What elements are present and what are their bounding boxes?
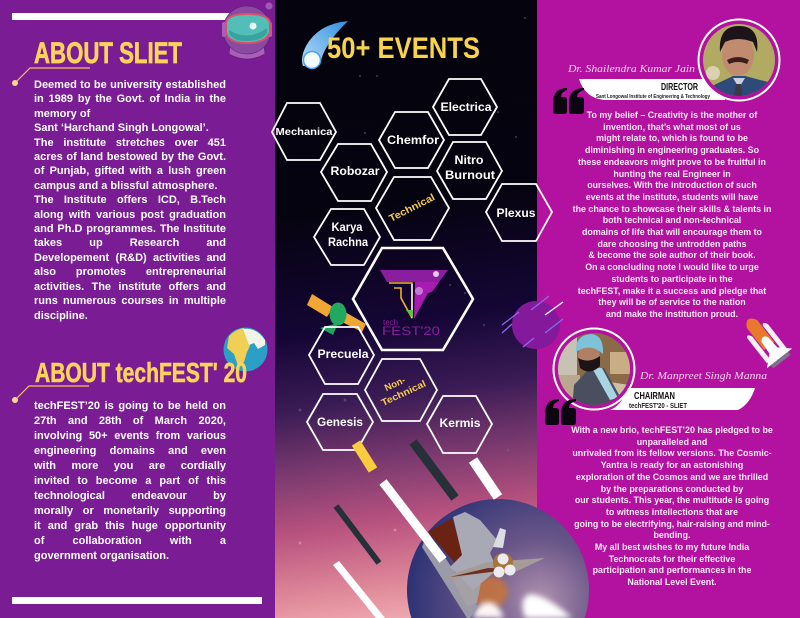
text block: director message: dare choosing the untrodden paths [598,239,746,249]
chairman name: Dr. Manpreet Singh Manna [639,370,768,382]
hexagon: Plexus: Plexus [496,208,536,220]
text block: director message: events at the institute, students will have [586,192,758,202]
text block: chairman message: to witness intellections that are [606,507,738,517]
hexagon: Nitro Burnout: Nitro [454,155,484,167]
text block: director message: the chance to showcase their skills & talents in [573,204,771,214]
hexagon: Chemfor [379,112,444,168]
hexagon: Nitro Burnout [437,142,502,199]
text block: about sliet: in 1989 by the Govt. of India in the [34,93,226,105]
text block: director message: both technical and non-technical [603,215,741,225]
speed streaks [333,442,498,618]
text block: chairman message: With a new brio, techFEST’20 has pledged to be [571,425,773,435]
text block: about sliet: runs numerous courses in multiple [34,295,226,307]
text block: about sliet [34,79,226,322]
text block: director message: and make the institution proud. [606,309,738,319]
panel: messages (right column) [537,0,800,618]
icon: comet [302,21,348,68]
text block: chairman message: Yantra is ready for an astonishing [601,460,743,470]
text block: chairman message: National Level Event. [627,577,717,587]
text block: about sliet: Deemed to be university established [34,79,226,91]
text block: about sliet: The institute stretches over 451 [34,137,226,149]
text block: about techfest: techFEST’20 is going to be held on [34,400,226,412]
hexagon: Technical [376,177,449,240]
chairman ribbon: CHAIRMAN [634,390,675,402]
text block: about techfest: invited to become a part of this [34,475,226,487]
director name: Dr. Shailendra Kumar Jain [567,63,696,75]
text block: about techfest: engineering domains and even [34,445,226,457]
text block: director message: On a concluding note I would like to urge [585,262,759,272]
text block: director message: To my belief – Creativity is the mother of [587,110,757,120]
text block: director message [572,110,771,319]
panel: about (left column) [0,0,275,618]
hexagon: Mechanica: Mechanica [276,126,333,138]
hexagon: Genesis: Genesis [317,417,363,429]
text block: director message: domains of life that will encourage them to [582,227,762,237]
hexagon: Non-Technical: Technical [380,379,428,409]
hexagon: Electrica: Electrica [440,102,492,114]
hexagon: Non-Technical: Non- [383,375,407,394]
hexagon: Precuela: Precuela [318,349,369,361]
text block: about techfest [34,400,226,562]
hexagon: Chemfor: Chemfor [387,135,440,147]
hexagon: logo frame with techFEST'20 logo [353,248,473,350]
text block: chairman message: our students. This year, the multitude is going [575,495,769,505]
stars [298,17,530,544]
hexagon: Kermis [427,396,492,453]
icon: earth globe [224,328,268,372]
text block: chairman message: My all best wishes to my future India [595,542,749,552]
chairman photo [552,328,636,410]
hexagon: Precuela [309,327,374,384]
hexagon: Genesis [307,394,373,450]
hexagon: Robozar [321,144,387,201]
icon: space shuttle rocket [746,318,792,368]
director ribbon: DIRECTOR [661,81,698,93]
hexagon: Karya Rachna: Rachna [328,237,369,249]
icon: quote mark (director) [553,88,584,114]
hexagon: Technical: Technical [387,192,437,225]
text block: chairman message: unrivaled from its fellow versions. The Cosmic- [572,448,772,458]
text block: about techfest: morally or monetarily supporting [34,505,226,517]
panel: events (centre column) [275,0,537,618]
text block: about sliet: discipline. [34,310,88,322]
hexagon: Kermis: Kermis [440,418,480,430]
text block: director message: might relate to, which is found to be [596,133,748,143]
text block: chairman message: going to be electrifying, hair-raising and mind- [574,519,770,529]
heading: 50+ events: 50+ EVENTS [327,32,480,65]
text block: chairman message: unparalleled and [637,437,707,447]
hexagon: Robozar: Robozar [330,166,380,178]
hexagon: Karya Rachna: Karya [332,222,363,234]
text block: about techfest: government organisation. [34,550,169,562]
text block: about sliet: takes up Research and [34,237,226,249]
satellite [307,294,366,335]
icon: astronaut helmet [222,2,272,60]
text block: director message: diminishing in engineering graduates. So [585,145,759,155]
text block: about sliet: The Institute offers ICD, B.Tech [34,194,226,206]
text block: director message: students to participate in the [611,274,733,284]
heading: about sliet: ABOUT SLIET [34,37,182,70]
text block: chairman message: exploration of the Cosmos and we are thrilled [576,472,768,482]
text block: chairman message: participation and performances in the [593,565,751,575]
text block: director message: ourselves. With the introduction of such [587,180,757,190]
text block: chairman message: by the preparations conducted by [601,484,743,494]
text block: director message: invention, that’s what most of us [603,122,741,132]
text block: about sliet: memory of [34,108,90,120]
text block: about techfest: 27th and 28th of March 2020, [34,415,226,427]
planet with space shuttle launch [407,499,589,618]
text block: director message: & become the sole author of their book. [588,250,756,260]
chairman ribbon [610,388,755,410]
text block: about sliet: Developement (R&D) activities and [34,252,226,264]
text block: director message: techFEST, make it a success and pledge that [578,286,766,296]
text block: about sliet: Sant ‘Harchand Singh Longowal’. [34,122,209,134]
text block: about sliet: acres of land bestowed by the Govt. [34,151,226,163]
hexagon: Non-Technical [365,359,437,421]
text block: about sliet: along with various post graduation [34,209,226,221]
text block: chairman message [571,425,773,587]
heading: about techfest [12,357,247,403]
chairman ribbon: techFEST'20 - SLIET [629,401,687,410]
hexagon: Mechanica [272,103,336,160]
text block: about sliet: also promotes entrepreneurial [34,266,226,278]
hexagon: Karya Rachna [314,209,380,265]
hexagon: logo frame with techFEST'20 logo: tech [383,318,398,327]
text block: about sliet: campus and a blissful atmosphere. [34,180,217,192]
hexagon: Nitro Burnout: Burnout [445,170,495,182]
text block: about techfest: it and grab this huge opportunity [34,520,226,532]
heading: about sliet [12,37,182,86]
purple planet with streaks [502,296,563,349]
text block: about techfest: involving 50+ events from various [34,430,226,442]
hexagon: logo frame with techFEST'20 logo: FEST'20 [382,324,440,338]
hexagon: Plexus [486,184,552,241]
director photo [698,18,780,102]
text block: about techfest: technological endeavour by [34,490,226,502]
text block: chairman message: Technocrats for their effective [609,554,735,564]
director ribbon [579,79,725,100]
hexagon: Electrica [433,79,497,135]
text block: about techfest: with more you are cordially [34,460,226,472]
text block: director message: these endeavors might prove to be fruitful in [578,157,766,167]
text block: chairman message: bending. [654,530,690,540]
top white bar [12,13,230,20]
icon: quote mark (chairman) [545,399,576,425]
text block: about techfest: of collaboration with a [34,535,226,547]
bottom white bar [12,597,262,604]
text block: about sliet: activities. The institute offers and [34,281,226,293]
text block: director message: hunting the real Engineer in [613,169,731,179]
text block: director message: they will be of service to the nation [598,297,746,307]
text block: about sliet: of Punjab, gifted with a lush green [34,165,226,177]
text block: about sliet: and Ph.D programmes. The Institute [34,223,226,235]
